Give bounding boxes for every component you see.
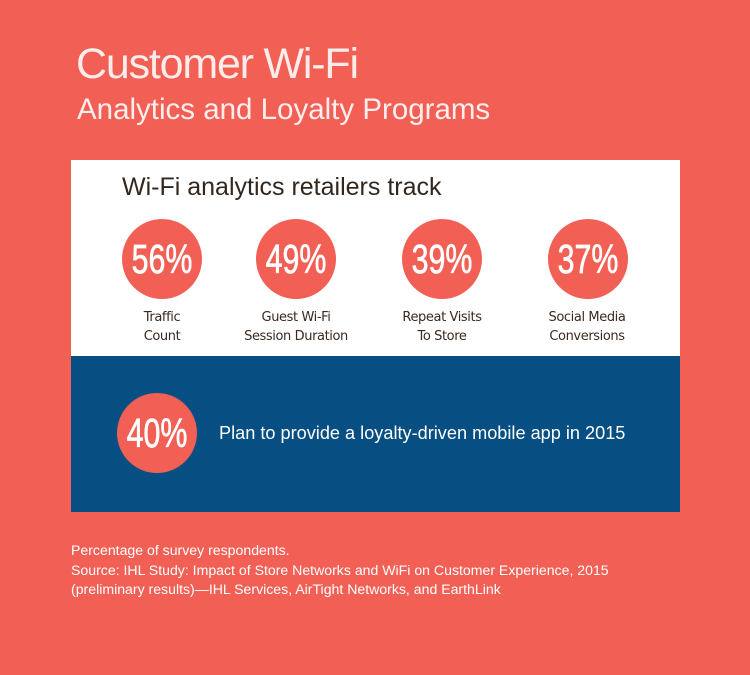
label: Conversions (549, 328, 625, 344)
label: Repeat Visits (402, 310, 482, 325)
source note: Percentage of survey respondents. (71, 542, 290, 558)
label: To Store (418, 328, 466, 344)
circle 56% (122, 219, 202, 299)
source note: (preliminary results)—IHL Services, AirTight Networks, and EarthLink (71, 581, 501, 597)
label (549, 310, 625, 344)
source note (71, 542, 609, 597)
loyalty statement: Plan to provide a loyalty-driven mobile app in 2015 (219, 423, 625, 443)
source note: Source: IHL Study: Impact of Store Networks and WiFi on Customer Experience, 2015 (71, 562, 609, 578)
circle 49%: 49% (266, 236, 326, 282)
title: Customer Wi-Fi (76, 40, 358, 88)
circle 40% (117, 393, 197, 473)
label (144, 310, 180, 344)
panel: analytics retailers track (71, 160, 680, 356)
label (402, 310, 482, 344)
circle 56%: 56% (132, 236, 192, 282)
circle 49% (256, 219, 336, 299)
stat: session duration (244, 219, 348, 344)
circle 39% (402, 219, 482, 299)
stat: social media (548, 219, 628, 344)
label: Session Duration (244, 328, 348, 344)
panel: loyalty app (71, 356, 680, 512)
panel heading: Wi-Fi analytics retailers track (122, 173, 442, 201)
subtitle: Analytics and Loyalty Programs (77, 93, 490, 126)
label: Traffic (144, 310, 180, 325)
stat: traffic count (122, 219, 202, 344)
stat: repeat visits (402, 219, 482, 344)
circle 37% (548, 219, 628, 299)
circle 39%: 39% (412, 236, 472, 282)
label: Guest Wi-Fi (262, 310, 330, 325)
label (244, 310, 348, 344)
circle 37%: 37% (558, 236, 618, 282)
circle 40%: 40% (127, 410, 187, 456)
label: Social Media (549, 310, 625, 325)
label: Count (144, 328, 180, 344)
